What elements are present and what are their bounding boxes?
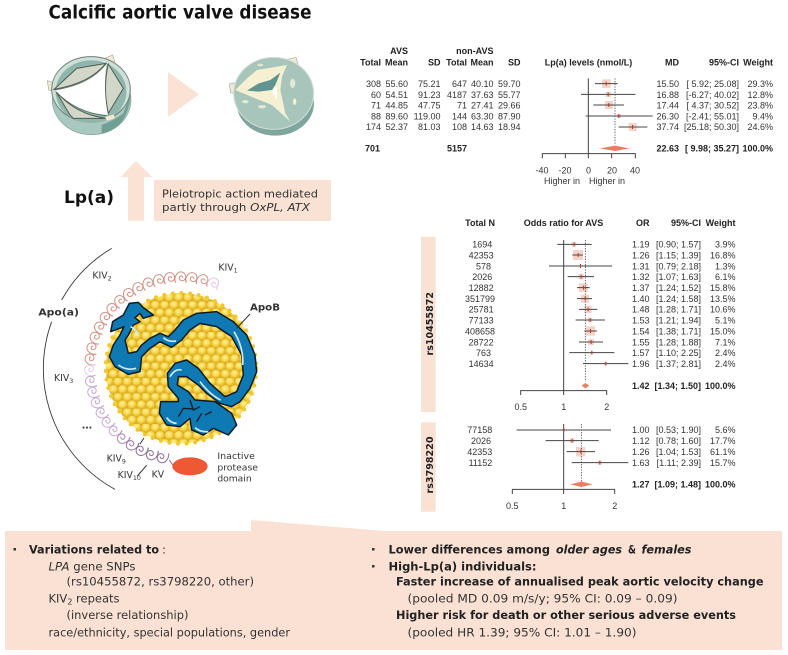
study rows: 12882 (469, 283, 494, 293)
study rows: 59.70 (498, 79, 520, 89)
study rows: 77133 (469, 316, 494, 326)
study rows: 40.10 (471, 79, 494, 89)
label: KIV2: KIV (92, 270, 108, 281)
table header: Total (360, 58, 381, 68)
text block: variations: (rs10455872, rs3798220, other) (66, 574, 254, 588)
study rows: 174 (366, 122, 381, 132)
study rows: [1.04; 1.53] (656, 447, 701, 457)
study rows: 1.40 (632, 294, 650, 304)
icon: inactive protease domain (169, 457, 208, 475)
forest chart (542, 78, 653, 158)
study rows: [-2.41; 55.01] (686, 111, 739, 121)
table header: Mean (385, 58, 408, 68)
table header: Total (446, 58, 467, 68)
pooled row: [1.34; 1.50] (654, 381, 701, 391)
text block: lower differences and high-Lp(a): females (642, 542, 692, 556)
table header: OR (636, 218, 650, 228)
study rows: 119.00 (414, 111, 440, 121)
text block: variations: race/ethnicity, special populations, gender (48, 626, 290, 640)
study rows: [1.28; 1.88] (656, 337, 701, 347)
label: KIV10: KIV (118, 470, 133, 481)
text block: lower differences and high-Lp(a) (372, 542, 764, 640)
study rows: 28722 (469, 337, 494, 347)
axis labels: 2 (604, 402, 609, 412)
label: inactive protease domain: domain (217, 474, 252, 484)
label: KIV1: KIV (218, 263, 234, 274)
kringle KIV1 (206, 276, 221, 290)
study rows: 1.54 (632, 326, 650, 336)
study rows: 18.94 (498, 122, 520, 132)
study rows: [1.24; 1.52] (656, 283, 701, 293)
study rows: 14.63 (471, 122, 494, 132)
study rows: 15.50 (656, 79, 679, 89)
table header: Odds ratio for AVS (524, 218, 603, 228)
study rows: 763 (476, 348, 491, 358)
panel: rs3798220 label bar (421, 422, 436, 512)
Apo(a) brace arc (43, 248, 115, 489)
study rows: [ 5.92; 25.08] (686, 79, 739, 89)
text block: variations: LPA gene SNPs (48, 560, 136, 574)
axis labels: 40 (630, 166, 640, 176)
pooled row: 100.0% (705, 381, 736, 391)
text block: lower differences and high-Lp(a): High-Lp(a) individuals: (388, 560, 536, 574)
kringle KIV3 to KIV10 repeats (85, 364, 169, 464)
study rows: [1.24; 1.58] (656, 294, 701, 304)
study rows: 23.8% (747, 100, 773, 110)
study rows: 37.74 (656, 122, 679, 132)
label: KIV3: KIV (54, 373, 69, 384)
table header: Weight (743, 58, 773, 68)
study rows: 108 (452, 122, 467, 132)
study rows: [1.15; 1.39] (656, 250, 701, 260)
table header: SD (428, 58, 441, 68)
study rows: 1.26 (632, 250, 650, 260)
icon: healthy aortic valve (47, 55, 131, 135)
study rows: 88 (371, 111, 381, 121)
study rows: 14634 (469, 359, 494, 369)
axis labels (514, 402, 609, 412)
label: inactive protease domain: protease (217, 463, 258, 473)
panel: rs10455872 forest plot (465, 218, 736, 412)
table header (360, 46, 773, 68)
forest chart (521, 240, 628, 395)
study rows: 55.77 (498, 90, 520, 100)
text block: variations: 2 (67, 598, 72, 606)
text block: variations: (inverse relationship) (66, 608, 188, 622)
study rows: 42353 (467, 447, 492, 457)
label: inactive protease domain: Inactive (217, 452, 255, 462)
panel: Lp(a) levels forest plot (360, 46, 773, 186)
axis labels: -40 (535, 166, 549, 176)
table header: MD (665, 58, 679, 68)
table header: AVS (390, 46, 408, 56)
study rows: 29.3% (747, 79, 773, 89)
study rows: 26.30 (656, 111, 679, 121)
pooled row: 100.0% (742, 144, 773, 154)
table header: Weight (706, 218, 736, 228)
study rows: 75.21 (418, 79, 440, 89)
label: KIV3: 3 (69, 378, 73, 385)
study rows: [25.18; 50.30] (684, 122, 739, 132)
study rows: 60 (371, 90, 381, 100)
pooled row (632, 480, 736, 490)
study rows: 87.90 (498, 111, 520, 121)
study rows: [1.10; 2.25] (656, 348, 701, 358)
study rows: 77158 (467, 425, 492, 435)
study rows: 13.5% (710, 294, 736, 304)
icon: calcified aortic valve (229, 57, 314, 136)
study rows: 5.1% (715, 316, 736, 326)
label: KIV2: 2 (108, 275, 112, 282)
study rows: 10.6% (710, 305, 736, 315)
label: KIV9: 9 (122, 459, 126, 466)
study rows: 1.00 (632, 425, 650, 435)
study rows: 52.37 (385, 122, 408, 132)
panel: rs3798220 label bar: rs3798220 (425, 436, 436, 494)
study rows: 17.7% (710, 436, 736, 446)
study rows (366, 79, 773, 132)
panel: Lp(a) molecule diagram (38, 248, 280, 489)
study rows: 11152 (469, 458, 492, 468)
panel: rs10455872 label bar (421, 237, 436, 412)
ApoB ribbon (109, 302, 257, 435)
study rows: 2026 (471, 436, 491, 446)
label: KIV10: 10 (133, 475, 141, 482)
study rows: 1.26 (632, 447, 650, 457)
study rows: 47.75 (418, 100, 440, 110)
table header: 95%-CI (709, 58, 739, 68)
axis labels: Higher in (544, 176, 580, 186)
study rows: 2.4% (715, 348, 736, 358)
pooled row: 1.27 (632, 480, 650, 490)
label: ApoB: ApoB (250, 302, 280, 313)
study rows: 7.1% (715, 337, 736, 347)
pooled row (632, 381, 736, 391)
study rows: 71 (457, 100, 467, 110)
study rows: 351799 (465, 294, 495, 304)
table header: Lp(a) levels (nmol/L) (545, 58, 632, 68)
callout: pleiotropic action (154, 180, 331, 221)
study rows: 61.1% (710, 447, 736, 457)
pooled row: 701 (365, 144, 380, 154)
table header: non-AVS (456, 46, 494, 56)
study rows: 12.8% (747, 90, 773, 100)
label: KIV1: 1 (234, 268, 238, 275)
study rows (467, 425, 736, 468)
heading: Lp(a): Lp(a) (64, 188, 114, 208)
axis labels: 0.5 (506, 501, 519, 511)
study rows: 4187 (447, 90, 467, 100)
panel: rs10455872 label bar: rs10455872 (425, 292, 436, 356)
arrow: progression to calcified valve (168, 72, 199, 117)
study rows: 1.31 (632, 261, 650, 271)
panel: rs3798220 forest plot (467, 424, 736, 511)
study rows: [1.37; 2.81] (656, 359, 701, 369)
axis labels: 1 (561, 501, 566, 511)
study rows: 27.41 (471, 100, 494, 110)
study rows (465, 240, 736, 369)
text block: lower differences and high-Lp(a): Lower differences among (388, 542, 550, 556)
callout: pleiotropic action: partly through OxPL, ATX (162, 202, 311, 214)
lipid core (106, 293, 256, 444)
kringle KIV2 repeats (84, 272, 209, 365)
pooled row: 1.42 (632, 381, 650, 391)
pooled row: [1.09; 1.48] (654, 480, 701, 490)
axis labels: 1 (561, 402, 566, 412)
study rows: 42353 (469, 250, 494, 260)
study rows: 54.51 (385, 90, 408, 100)
study rows: 63.30 (471, 111, 494, 121)
pooled row (365, 144, 773, 154)
study rows: 81.03 (418, 122, 440, 132)
table header (465, 218, 736, 228)
leader lines (137, 314, 250, 476)
text block: lower differences and high-Lp(a): older ages (556, 542, 622, 556)
study rows: 24.6% (747, 122, 773, 132)
study rows: 2.4% (715, 359, 736, 369)
study rows: 1.12 (632, 436, 650, 446)
table header: Mean (470, 58, 494, 68)
study rows: 308 (366, 79, 381, 89)
study rows: 1.3% (715, 261, 736, 271)
study rows: 578 (476, 261, 491, 271)
study rows: 2026 (472, 272, 492, 282)
table header: Total N (465, 218, 495, 228)
table header: 95%-CI (671, 218, 701, 228)
study rows: 89.60 (385, 111, 408, 121)
axis labels (506, 501, 617, 511)
pooled row: 22.63 (656, 144, 679, 154)
axis labels (535, 166, 640, 186)
study rows: [1.38; 1.71] (656, 326, 701, 336)
study rows: 25781 (469, 305, 494, 315)
study rows: 1.63 (632, 458, 650, 468)
axis labels: Higher in (589, 176, 625, 186)
axis labels: 20 (607, 166, 617, 176)
study rows: 144 (452, 111, 467, 121)
title: Calcific aortic valve disease (48, 2, 312, 24)
axis labels: 2 (612, 501, 617, 511)
study rows: 55.60 (385, 79, 408, 89)
pooled row: 5157 (447, 144, 467, 154)
study rows: 1.37 (632, 283, 650, 293)
study rows: 15.7% (710, 458, 736, 468)
study rows: 9.4% (752, 111, 773, 121)
study rows: [0.78; 1.60] (656, 436, 701, 446)
label: KV: KV (152, 470, 165, 481)
text block: variations: : (162, 542, 166, 556)
study rows: [1.11; 2.39] (657, 458, 701, 468)
study rows: 17.44 (656, 100, 679, 110)
label: KIV9: KIV (107, 454, 122, 465)
text block: lower differences and high-Lp(a): & (628, 542, 636, 556)
study rows: 1.32 (632, 272, 650, 282)
study rows: 6.1% (715, 272, 736, 282)
axis labels: 0 (586, 166, 591, 176)
study rows: 91.23 (418, 90, 440, 100)
study rows: 3.9% (715, 240, 736, 250)
study rows: [1.21; 1.94] (656, 316, 701, 326)
study rows: 15.0% (710, 326, 736, 336)
axis labels: -20 (558, 166, 572, 176)
text block: variations (14, 542, 290, 640)
study rows: 15.8% (710, 283, 736, 293)
pooled row: [ 9.98; 35.27] (685, 144, 739, 154)
study rows: 5.6% (715, 425, 736, 435)
study rows: [1.28; 1.71] (656, 305, 701, 315)
axis labels: 0.5 (514, 402, 527, 412)
study rows: 1.55 (632, 337, 650, 347)
study rows: 71 (371, 100, 381, 110)
label: inactive protease domain (217, 452, 258, 484)
text block: variations: KIV (48, 592, 67, 606)
study rows: 16.88 (656, 90, 679, 100)
panel: bottom summary (5, 520, 782, 650)
text block: lower differences and high-Lp(a): Higher risk for death or other serious adverse events (396, 608, 736, 622)
study rows: [ 4.37; 30.52] (686, 100, 739, 110)
pooled row: 100.0% (705, 480, 736, 490)
table header: SD (508, 58, 521, 68)
study rows: 408658 (465, 326, 495, 336)
text block: lower differences and high-Lp(a): (pooled MD 0.09 m/s/y; 95% CI: 0.09 – 0.09) (408, 592, 678, 606)
study rows: 1.96 (632, 359, 650, 369)
study rows: [0.79; 2.18] (656, 261, 701, 271)
study rows: 1694 (472, 240, 492, 250)
study rows: 1.19 (632, 240, 650, 250)
study rows: [0.90; 1.57] (656, 240, 701, 250)
study rows: 1.48 (632, 305, 650, 315)
study rows: 647 (452, 79, 467, 89)
label: ellipsis: ... (82, 420, 92, 431)
study rows: 1.53 (632, 316, 650, 326)
forest chart (512, 424, 628, 494)
callout: pleiotropic action: Pleiotropic action mediated (162, 188, 318, 200)
study rows: [-6.27; 40.02] (686, 90, 739, 100)
study rows: [1.07; 1.63] (656, 272, 701, 282)
study rows: 16.8% (710, 250, 736, 260)
study rows: 1.57 (632, 348, 650, 358)
text block: lower differences and high-Lp(a): Faster increase of annualised peak aortic velocity change (396, 574, 764, 588)
study rows: 44.85 (385, 100, 408, 110)
text block: lower differences and high-Lp(a): (pooled HR 1.39; 95% CI: 1.01 – 1.90) (408, 626, 636, 640)
study rows: [0.53; 1.90] (656, 425, 701, 435)
label: Apo(a): Apo(a) (38, 307, 79, 318)
study rows: 37.63 (471, 90, 494, 100)
text block: variations: repeats (72, 592, 120, 606)
text block: variations: Variations related to (29, 542, 159, 556)
study rows: 29.66 (498, 100, 520, 110)
arrow: Lp(a) up to valve disease (120, 161, 152, 221)
